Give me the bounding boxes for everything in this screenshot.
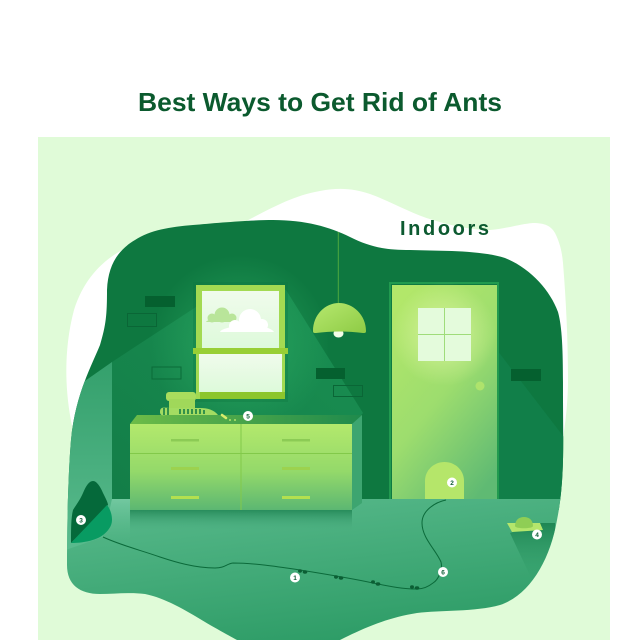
crumbs: [222, 415, 226, 418]
light beam on wall: [112, 285, 363, 500]
badge 5: [243, 411, 253, 421]
bait station shadow: [510, 523, 556, 570]
window sash bar: [193, 348, 288, 354]
badge 5: 5: [246, 414, 250, 420]
dresser side: [352, 415, 362, 510]
right light beam: [499, 354, 564, 500]
leaf lower half: [71, 505, 112, 543]
badge 2: [447, 478, 457, 488]
dresser front: [130, 424, 352, 510]
badge 6: [438, 567, 448, 577]
door window: [418, 308, 471, 361]
floor corner: [110, 499, 130, 520]
mouse hole: [425, 462, 464, 499]
title: Best Ways to Get Rid of Ants: [138, 87, 502, 117]
badge 1: 1: [293, 575, 297, 582]
badge 2: 2: [450, 480, 454, 487]
door window glow: [392, 282, 496, 386]
leaf-shaped plant with entry point: [71, 481, 112, 543]
upper window pane: [202, 291, 279, 349]
back wall: [60, 210, 570, 510]
pendant lamp: [313, 232, 366, 338]
ant trail: [103, 500, 446, 589]
lamp shade: [313, 303, 366, 333]
badge 4: [532, 530, 542, 540]
bait dome: [515, 517, 533, 528]
cloud: green: [206, 308, 238, 322]
panel: background: [38, 137, 610, 640]
dresser top: [130, 415, 362, 424]
door knob: [476, 382, 484, 390]
badge 3: 3: [79, 518, 83, 524]
cloud: white: [220, 309, 274, 332]
left side wall light: [67, 362, 112, 549]
number badges: [76, 411, 542, 582]
bait station: [507, 517, 543, 532]
badge 4: 4: [535, 532, 539, 539]
door: [389, 282, 499, 499]
floor: [60, 499, 570, 640]
ants: [298, 569, 419, 590]
infographic: [38, 92, 610, 640]
lower window pane: [199, 354, 282, 392]
white backdrop blob: [66, 189, 568, 445]
badge 1: [290, 572, 300, 582]
wall bricks: [128, 296, 541, 396]
comb-shaped bait tray: [160, 408, 218, 415]
dresser handles: [171, 439, 310, 499]
window: [193, 282, 288, 402]
ant bait container on dresser: [160, 392, 236, 421]
window glow: [174, 274, 308, 410]
lamp bulb: [334, 330, 344, 338]
panel: room scene: [60, 210, 570, 640]
dresser: [130, 415, 362, 510]
window bottom bar: [200, 392, 285, 399]
badge 3: [76, 515, 86, 525]
badge 6: 6: [441, 570, 445, 576]
heading: Indoors: Indoors: [400, 218, 489, 240]
dresser floor shadow: [130, 510, 352, 522]
